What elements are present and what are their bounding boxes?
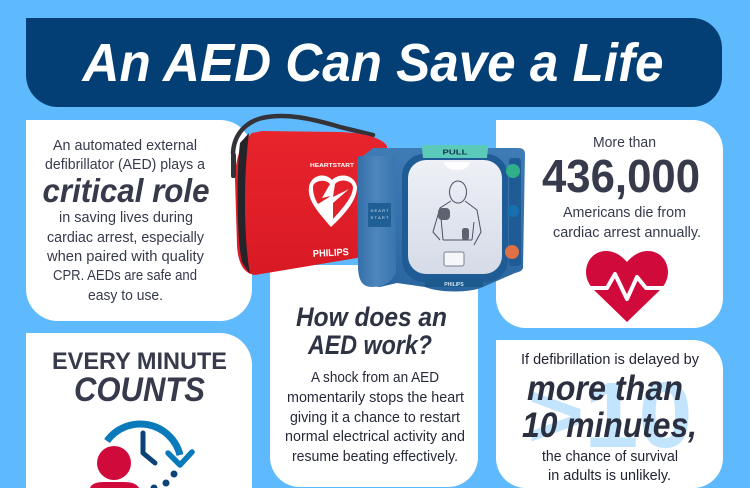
case heart logo bbox=[309, 176, 357, 227]
text: chance of survival: in adults is unlikely. bbox=[548, 467, 671, 484]
number: 436,000 bbox=[542, 150, 700, 202]
panel: intro: cardiac arrest, especially bbox=[47, 229, 204, 246]
big text bbox=[522, 369, 697, 445]
panel: intro: easy to use. bbox=[88, 287, 163, 304]
panel: every minute counts bbox=[26, 333, 252, 488]
image: blue AED device: PULL bbox=[442, 148, 468, 156]
heading bbox=[296, 302, 447, 360]
pull tab bbox=[422, 145, 488, 158]
panel: intro: when paired with quality bbox=[46, 248, 204, 265]
text: chance of survival bbox=[542, 448, 678, 484]
text: more than: More than bbox=[593, 134, 656, 151]
panel: intro: in saving lives during bbox=[59, 209, 193, 226]
body text: giving it a chance to restart bbox=[290, 409, 461, 426]
panel: intro: An automated external bbox=[53, 137, 197, 154]
device button strip bbox=[509, 158, 521, 266]
panel: intro bbox=[26, 120, 252, 321]
panel: intro: CPR. AEDs are safe and bbox=[53, 267, 197, 284]
icon: clock and person bbox=[90, 424, 192, 488]
big text: 10 minutes, bbox=[522, 406, 697, 445]
device buttons bbox=[506, 164, 520, 178]
body text: resume beating effectively. bbox=[292, 448, 458, 465]
title: An AED Can Save a Life bbox=[81, 33, 664, 93]
inner ring bbox=[402, 154, 508, 282]
panel: intro: defibrillator (AED) plays a bbox=[45, 156, 206, 173]
image: blue AED device: PHILIPS bbox=[444, 282, 464, 288]
heading: every minute: EVERY MINUTE bbox=[52, 348, 227, 375]
image: blue AED device: START bbox=[370, 215, 389, 220]
body text bbox=[285, 369, 465, 465]
text: chance of survival: the chance of survival bbox=[542, 448, 678, 465]
text: americans: Americans die from bbox=[563, 204, 686, 221]
body text: momentarily stops the heart bbox=[287, 389, 465, 406]
panel: how does an AED work bbox=[270, 265, 478, 487]
text: if defibrillation: If defibrillation is delayed by bbox=[521, 351, 699, 368]
electrode pad window bbox=[408, 160, 502, 274]
text: americans bbox=[553, 204, 701, 241]
pad figure bbox=[433, 181, 481, 245]
panel: more than 10 minutes bbox=[496, 340, 723, 488]
heading: AED work? bbox=[307, 330, 432, 360]
image: blue AED device bbox=[357, 145, 525, 292]
panel: intro: critical role bbox=[42, 172, 210, 209]
body text: A shock from an AED bbox=[311, 369, 439, 386]
big text: more than bbox=[527, 369, 683, 408]
heading: How does an bbox=[296, 302, 447, 332]
image: red AED case bbox=[231, 116, 387, 275]
text: americans: cardiac arrest annually. bbox=[553, 224, 701, 241]
panel: 436,000 statistic bbox=[496, 120, 723, 328]
case brand: PHILIPS bbox=[313, 247, 349, 260]
icon: heart with pulse bbox=[584, 251, 670, 322]
watermark: >10: >10 bbox=[528, 363, 692, 467]
case label: HEARTSTART bbox=[310, 163, 355, 169]
heading: counts: COUNTS bbox=[74, 371, 205, 409]
device logo: HEART bbox=[370, 208, 389, 213]
body text: normal electrical activity and bbox=[285, 428, 465, 445]
device brand bbox=[425, 279, 483, 287]
title banner bbox=[26, 18, 722, 107]
